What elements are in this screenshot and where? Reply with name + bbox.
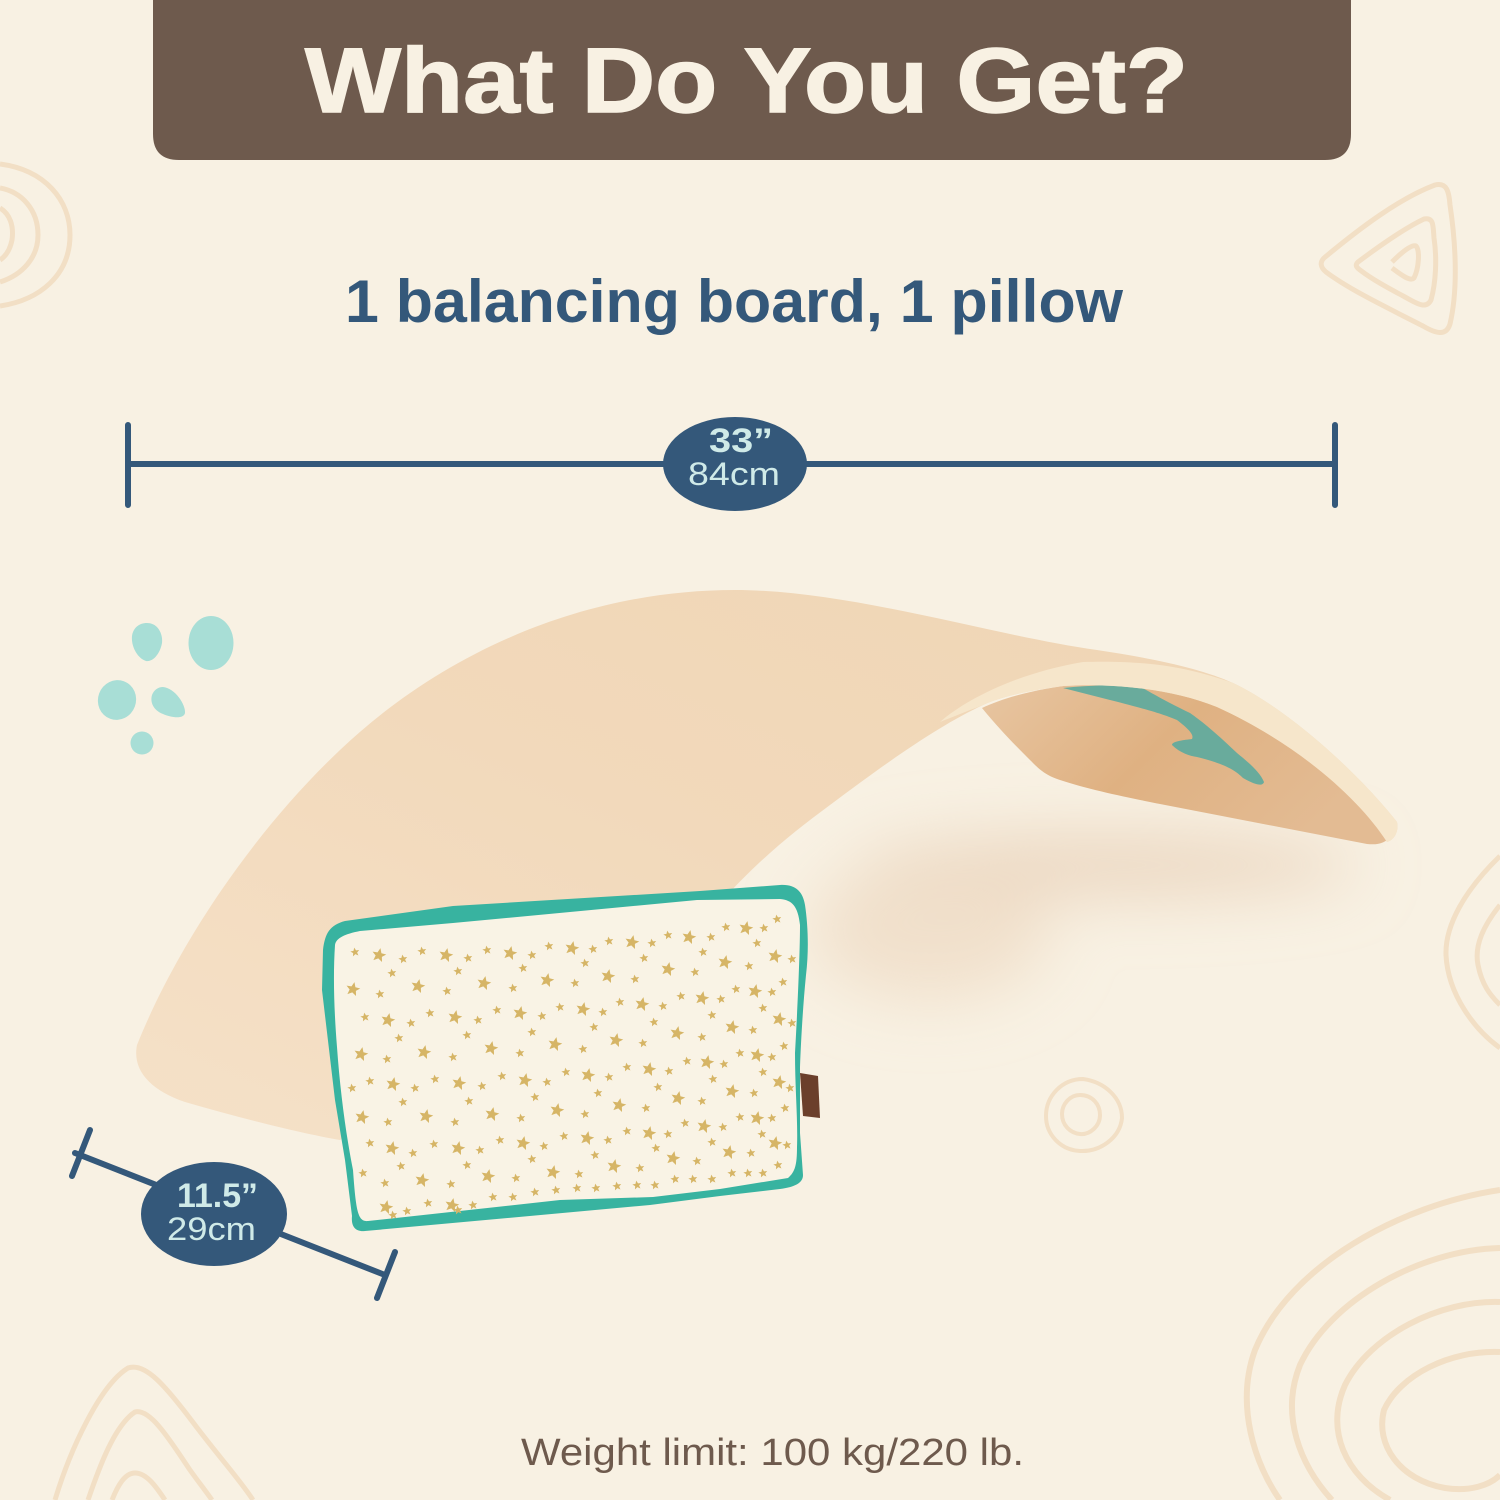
decorative swirl: bottom right — [1247, 1190, 1500, 1500]
pillow tag — [800, 1073, 820, 1118]
dimension: pillow width: 11.5” — [177, 1177, 258, 1215]
pillow piping — [322, 885, 808, 1231]
dimension: board length — [128, 417, 1335, 511]
decorative swirl: bottom left — [55, 1367, 253, 1500]
dimension: board length: 84cm — [688, 456, 780, 492]
decorative teal dots — [92, 616, 234, 754]
board shadow — [810, 835, 1360, 1000]
title: What Do You Get? — [305, 30, 1188, 132]
dimension: board length: 33” — [709, 422, 773, 460]
board plywood edge — [940, 662, 1397, 842]
pillow back — [490, 893, 700, 920]
dimension: pillow width — [72, 1130, 395, 1298]
header banner — [153, 0, 1351, 160]
decorative swirl: center small — [1046, 1079, 1122, 1151]
pillow stars — [345, 914, 797, 1220]
decorative swirl: top right triangle — [1321, 184, 1455, 333]
balancing board — [136, 590, 1397, 1140]
decorative swirl: right edge — [1446, 856, 1500, 1048]
board top surface — [136, 590, 1397, 1140]
dimension: pillow width: 29cm — [167, 1211, 256, 1247]
subtitle: 1 balancing board, 1 pillow — [345, 268, 1123, 335]
decorative swirl: top left — [0, 164, 70, 306]
pillow — [322, 885, 820, 1231]
teal paint on board — [1063, 685, 1264, 785]
weight limit note: Weight limit: 100 kg/220 lb. — [521, 1432, 1024, 1474]
board underside — [982, 683, 1392, 844]
pillow face — [334, 899, 800, 1221]
